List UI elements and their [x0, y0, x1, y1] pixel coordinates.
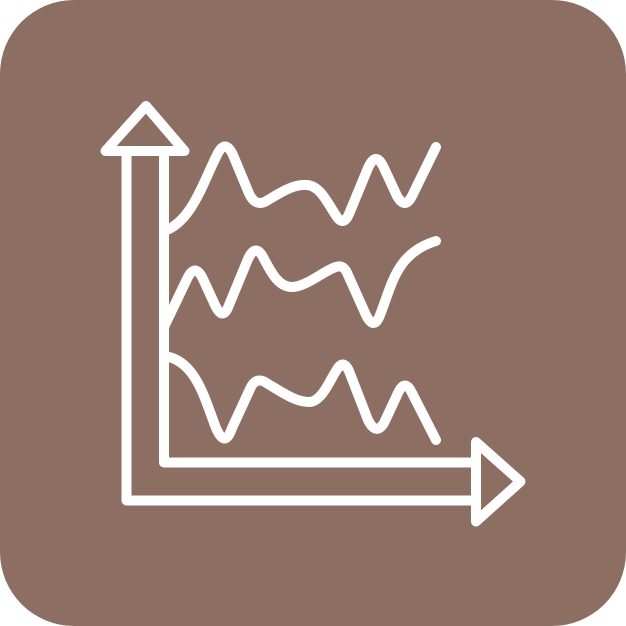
arrow: axes outline with up and right arrowheads: [106, 106, 520, 522]
line: bottom data series: [164, 356, 436, 440]
chart: axes and data lines: [106, 106, 520, 522]
line: top data series: [164, 146, 436, 231]
line: middle data series: [164, 241, 436, 327]
